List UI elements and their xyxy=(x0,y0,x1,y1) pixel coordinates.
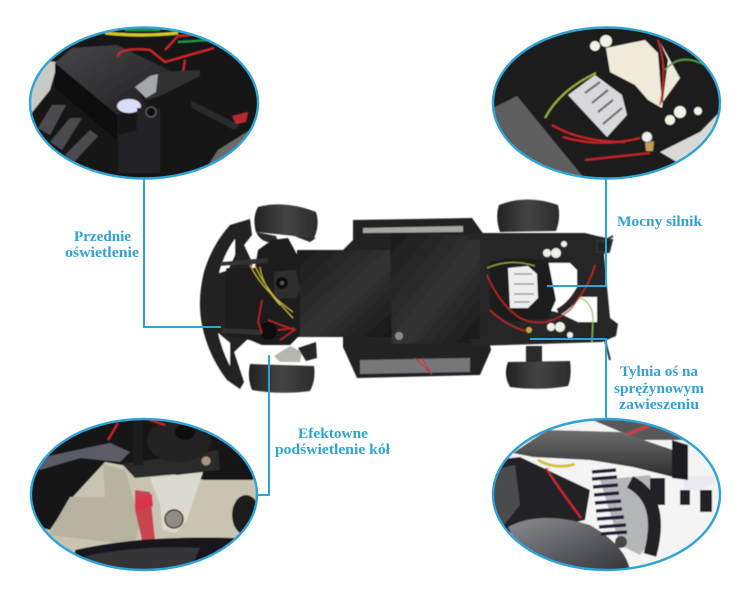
dark upper area xyxy=(31,419,257,530)
label: front lights: Przednie xyxy=(74,229,131,245)
grey panel xyxy=(493,96,584,178)
foam washer xyxy=(148,422,210,458)
motor xyxy=(487,258,595,342)
beige floor xyxy=(48,464,140,545)
line: motor xyxy=(547,178,606,286)
wires xyxy=(538,460,575,466)
red LED xyxy=(135,490,155,540)
chassis vents xyxy=(363,226,463,233)
wires xyxy=(108,420,165,440)
rear hinges xyxy=(597,236,613,360)
line: wheel lighting xyxy=(257,355,269,495)
front steering assembly xyxy=(220,238,300,345)
spring xyxy=(592,470,627,534)
photo circle: spring suspension xyxy=(493,419,721,570)
rear top wheel xyxy=(497,200,559,232)
label: front lights: oświetlenie xyxy=(65,245,139,261)
label: rear axle: sprężynowym xyxy=(614,381,705,397)
front bracket xyxy=(274,346,302,362)
rear window xyxy=(547,263,597,322)
white background sliver xyxy=(31,60,57,114)
rear frame xyxy=(468,233,618,346)
module box xyxy=(55,45,173,115)
photo circle: wheel lighting xyxy=(30,419,260,570)
grey hub xyxy=(600,474,651,556)
solder tab xyxy=(642,132,652,142)
rear bottom wheel xyxy=(506,361,571,389)
main cover xyxy=(390,233,483,344)
label: wheel lighting: podświetlenie kół xyxy=(275,442,391,458)
bracket xyxy=(150,472,203,533)
label: rear axle: Tylnia oś na xyxy=(620,364,699,380)
connector lines xyxy=(144,178,606,495)
LED xyxy=(117,99,141,113)
frame holes xyxy=(543,241,573,338)
right wedge xyxy=(208,130,249,164)
rear connectors xyxy=(650,478,712,512)
silver arm xyxy=(30,443,130,470)
wires xyxy=(105,33,178,35)
wheel arc xyxy=(74,537,235,562)
LED holder xyxy=(145,70,200,100)
frame holes xyxy=(590,35,702,125)
left dark block xyxy=(493,457,590,535)
black arc xyxy=(630,482,654,555)
wheel grey xyxy=(508,518,630,570)
line: front lights xyxy=(144,178,221,327)
right knob xyxy=(232,494,256,534)
wires xyxy=(545,73,596,118)
front wing xyxy=(200,219,252,389)
light background areas xyxy=(606,40,680,108)
motor plate xyxy=(568,75,627,137)
battery cover xyxy=(297,250,392,337)
right beige area xyxy=(252,478,254,480)
label: wheel lighting: Efektowne xyxy=(298,426,368,442)
front bottom wheel xyxy=(249,364,314,393)
label: motor: Mocny silnik xyxy=(617,214,703,230)
suspension arm xyxy=(513,430,677,478)
car chassis photo xyxy=(200,200,618,393)
post xyxy=(118,108,160,173)
rear frame diagonals xyxy=(558,245,597,312)
front top wheel xyxy=(254,204,318,243)
line: rear axle xyxy=(530,339,606,419)
top background clutter xyxy=(590,419,690,440)
black plate xyxy=(122,450,220,478)
bottom hex chassis plate xyxy=(343,218,491,378)
photo circle: motor xyxy=(493,27,721,178)
label: rear axle: zawieszeniu xyxy=(619,397,699,413)
photo circle: front light xyxy=(30,27,258,178)
fins xyxy=(38,105,98,162)
